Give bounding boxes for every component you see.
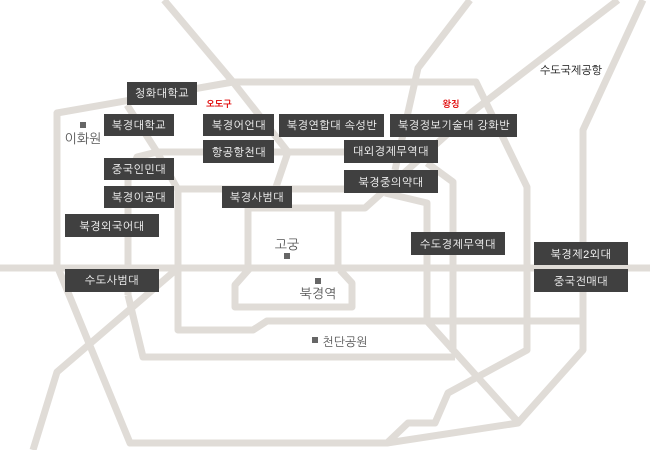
label: 수도사범대: 수도사범대	[85, 274, 139, 287]
label: 북경연합대 속성반	[279, 114, 384, 137]
label: 수도경제무역대	[411, 232, 505, 255]
label: 북경중의약대	[344, 170, 438, 193]
label: 북경외국어대: 북경외국어대	[79, 220, 145, 233]
label: 북경정보기술대 강화반	[390, 114, 517, 137]
landmark: 고궁: 고궁	[275, 237, 299, 252]
label: 대외경제무역대	[344, 140, 438, 163]
label: 북경대학교: 북경대학교	[112, 119, 166, 132]
label: 북경정보기술대 강화반: 북경정보기술대 강화반	[398, 119, 510, 132]
label: 중국인민대	[104, 158, 174, 180]
label: 중국전매대	[534, 269, 628, 292]
label: 북경제2외대	[534, 242, 628, 265]
label: 북경사범대: 북경사범대	[230, 191, 284, 204]
label: 북경연합대 속성반: 북경연합대 속성반	[287, 119, 377, 132]
landmark: 북경역: 북경역	[300, 286, 336, 301]
label: 북경어언대	[203, 114, 274, 136]
label: 북경대학교	[104, 114, 174, 136]
label: 북경제2외대: 북경제2외대	[551, 248, 611, 261]
label: 중국인민대: 중국인민대	[112, 163, 166, 176]
label: 북경이공대	[104, 186, 174, 208]
landmark: 천단공원: 천단공원	[322, 335, 368, 349]
label: 북경사범대	[222, 186, 292, 208]
label: 대외경제무역대: 대외경제무역대	[353, 145, 429, 158]
label: 수도경제무역대: 수도경제무역대	[420, 238, 496, 251]
label: 항공항천대: 항공항천대	[212, 146, 266, 159]
label: 북경중의약대: 북경중의약대	[358, 176, 424, 189]
label: 수도사범대	[65, 269, 159, 292]
district: 오도구: 오도구	[206, 99, 232, 109]
label: 청화대학교	[127, 82, 197, 105]
label: 수도국제공항: 수도국제공항	[540, 64, 603, 77]
landmark: 북경역	[300, 278, 336, 301]
label: 중국전매대: 중국전매대	[554, 275, 608, 288]
label: 북경외국어대	[65, 214, 159, 237]
label: 북경이공대: 북경이공대	[112, 191, 166, 204]
label: 항공항천대	[203, 140, 274, 163]
label: 청화대학교: 청화대학교	[135, 87, 189, 100]
landmark: 이화원: 이화원	[65, 131, 101, 146]
landmark: 이화원	[65, 122, 101, 146]
district: 왕징: 왕징	[443, 99, 459, 109]
label: 북경어언대: 북경어언대	[212, 119, 266, 132]
landmark: 고궁	[275, 237, 299, 259]
